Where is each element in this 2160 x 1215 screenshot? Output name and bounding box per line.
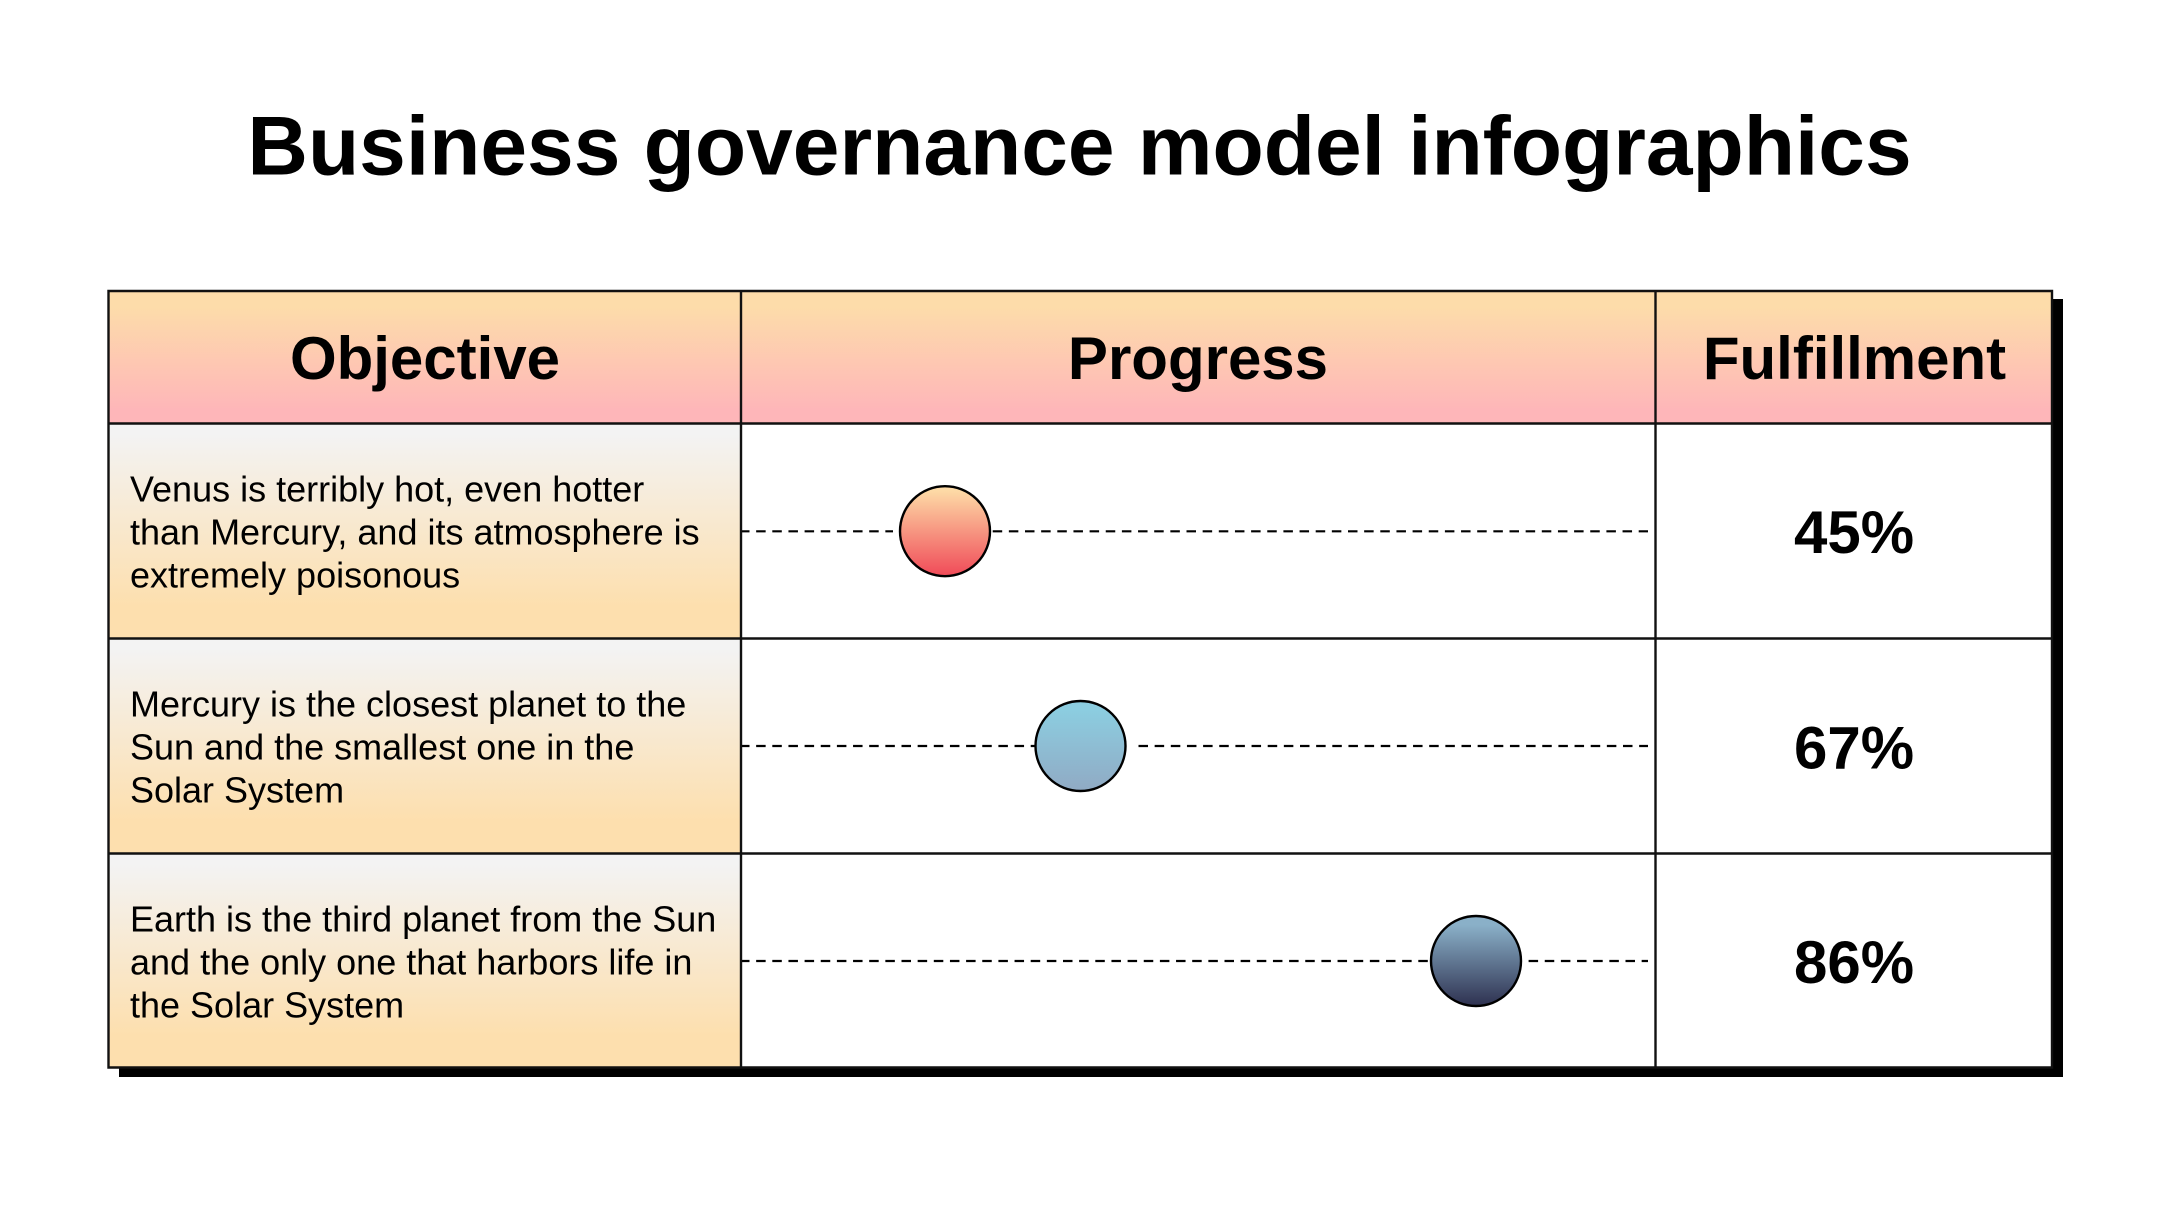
objective text: Venus: extremely poisonous bbox=[130, 555, 460, 596]
header cell: fulfillment: Fulfillment bbox=[1703, 325, 2006, 392]
objective text: Mercury: Sun and the smallest one in the bbox=[130, 727, 634, 768]
row 1: Venus bbox=[108, 424, 1914, 638]
header cell: fulfillment bbox=[1656, 291, 2052, 424]
header row bbox=[108, 291, 2052, 424]
objective text: Venus: than Mercury, and its atmosphere is bbox=[130, 512, 700, 553]
objective text: Mercury: Mercury is the closest planet to the bbox=[130, 683, 686, 724]
header cell: progress bbox=[741, 291, 1656, 424]
table drop shadow bbox=[119, 299, 2063, 1077]
objective text: Earth: the Solar System bbox=[130, 985, 404, 1026]
row 3: Earth bbox=[108, 854, 1914, 1068]
progress track: 86% bbox=[740, 916, 1648, 1006]
header cell: objective: Objective bbox=[290, 325, 560, 392]
title: Business governance model infographics bbox=[247, 98, 1912, 192]
objective text: Earth: and the only one that harbors life in bbox=[130, 942, 692, 983]
header cell: progress: Progress bbox=[1068, 325, 1328, 392]
objective text: Earth: Earth is the third planet from the Sun bbox=[130, 898, 716, 939]
progress track: 45% bbox=[740, 486, 1648, 576]
table background bbox=[108, 291, 2052, 1068]
progress track: 67% bbox=[740, 701, 1648, 791]
header cell: objective bbox=[108, 291, 741, 424]
row 2: Mercury bbox=[108, 638, 1914, 854]
objective text: Earth bbox=[108, 854, 741, 1068]
table bbox=[108, 291, 2063, 1077]
objective text: Mercury bbox=[108, 638, 741, 854]
objective text: Venus: Venus is terribly hot, even hotter bbox=[130, 468, 644, 509]
objective text: Venus bbox=[108, 424, 741, 638]
objective text: Mercury: Solar System bbox=[130, 770, 344, 811]
value: 67%: 67% bbox=[1794, 714, 1914, 782]
value: 45%: 45% bbox=[1794, 499, 1914, 566]
value: 86%: 86% bbox=[1794, 929, 1914, 996]
